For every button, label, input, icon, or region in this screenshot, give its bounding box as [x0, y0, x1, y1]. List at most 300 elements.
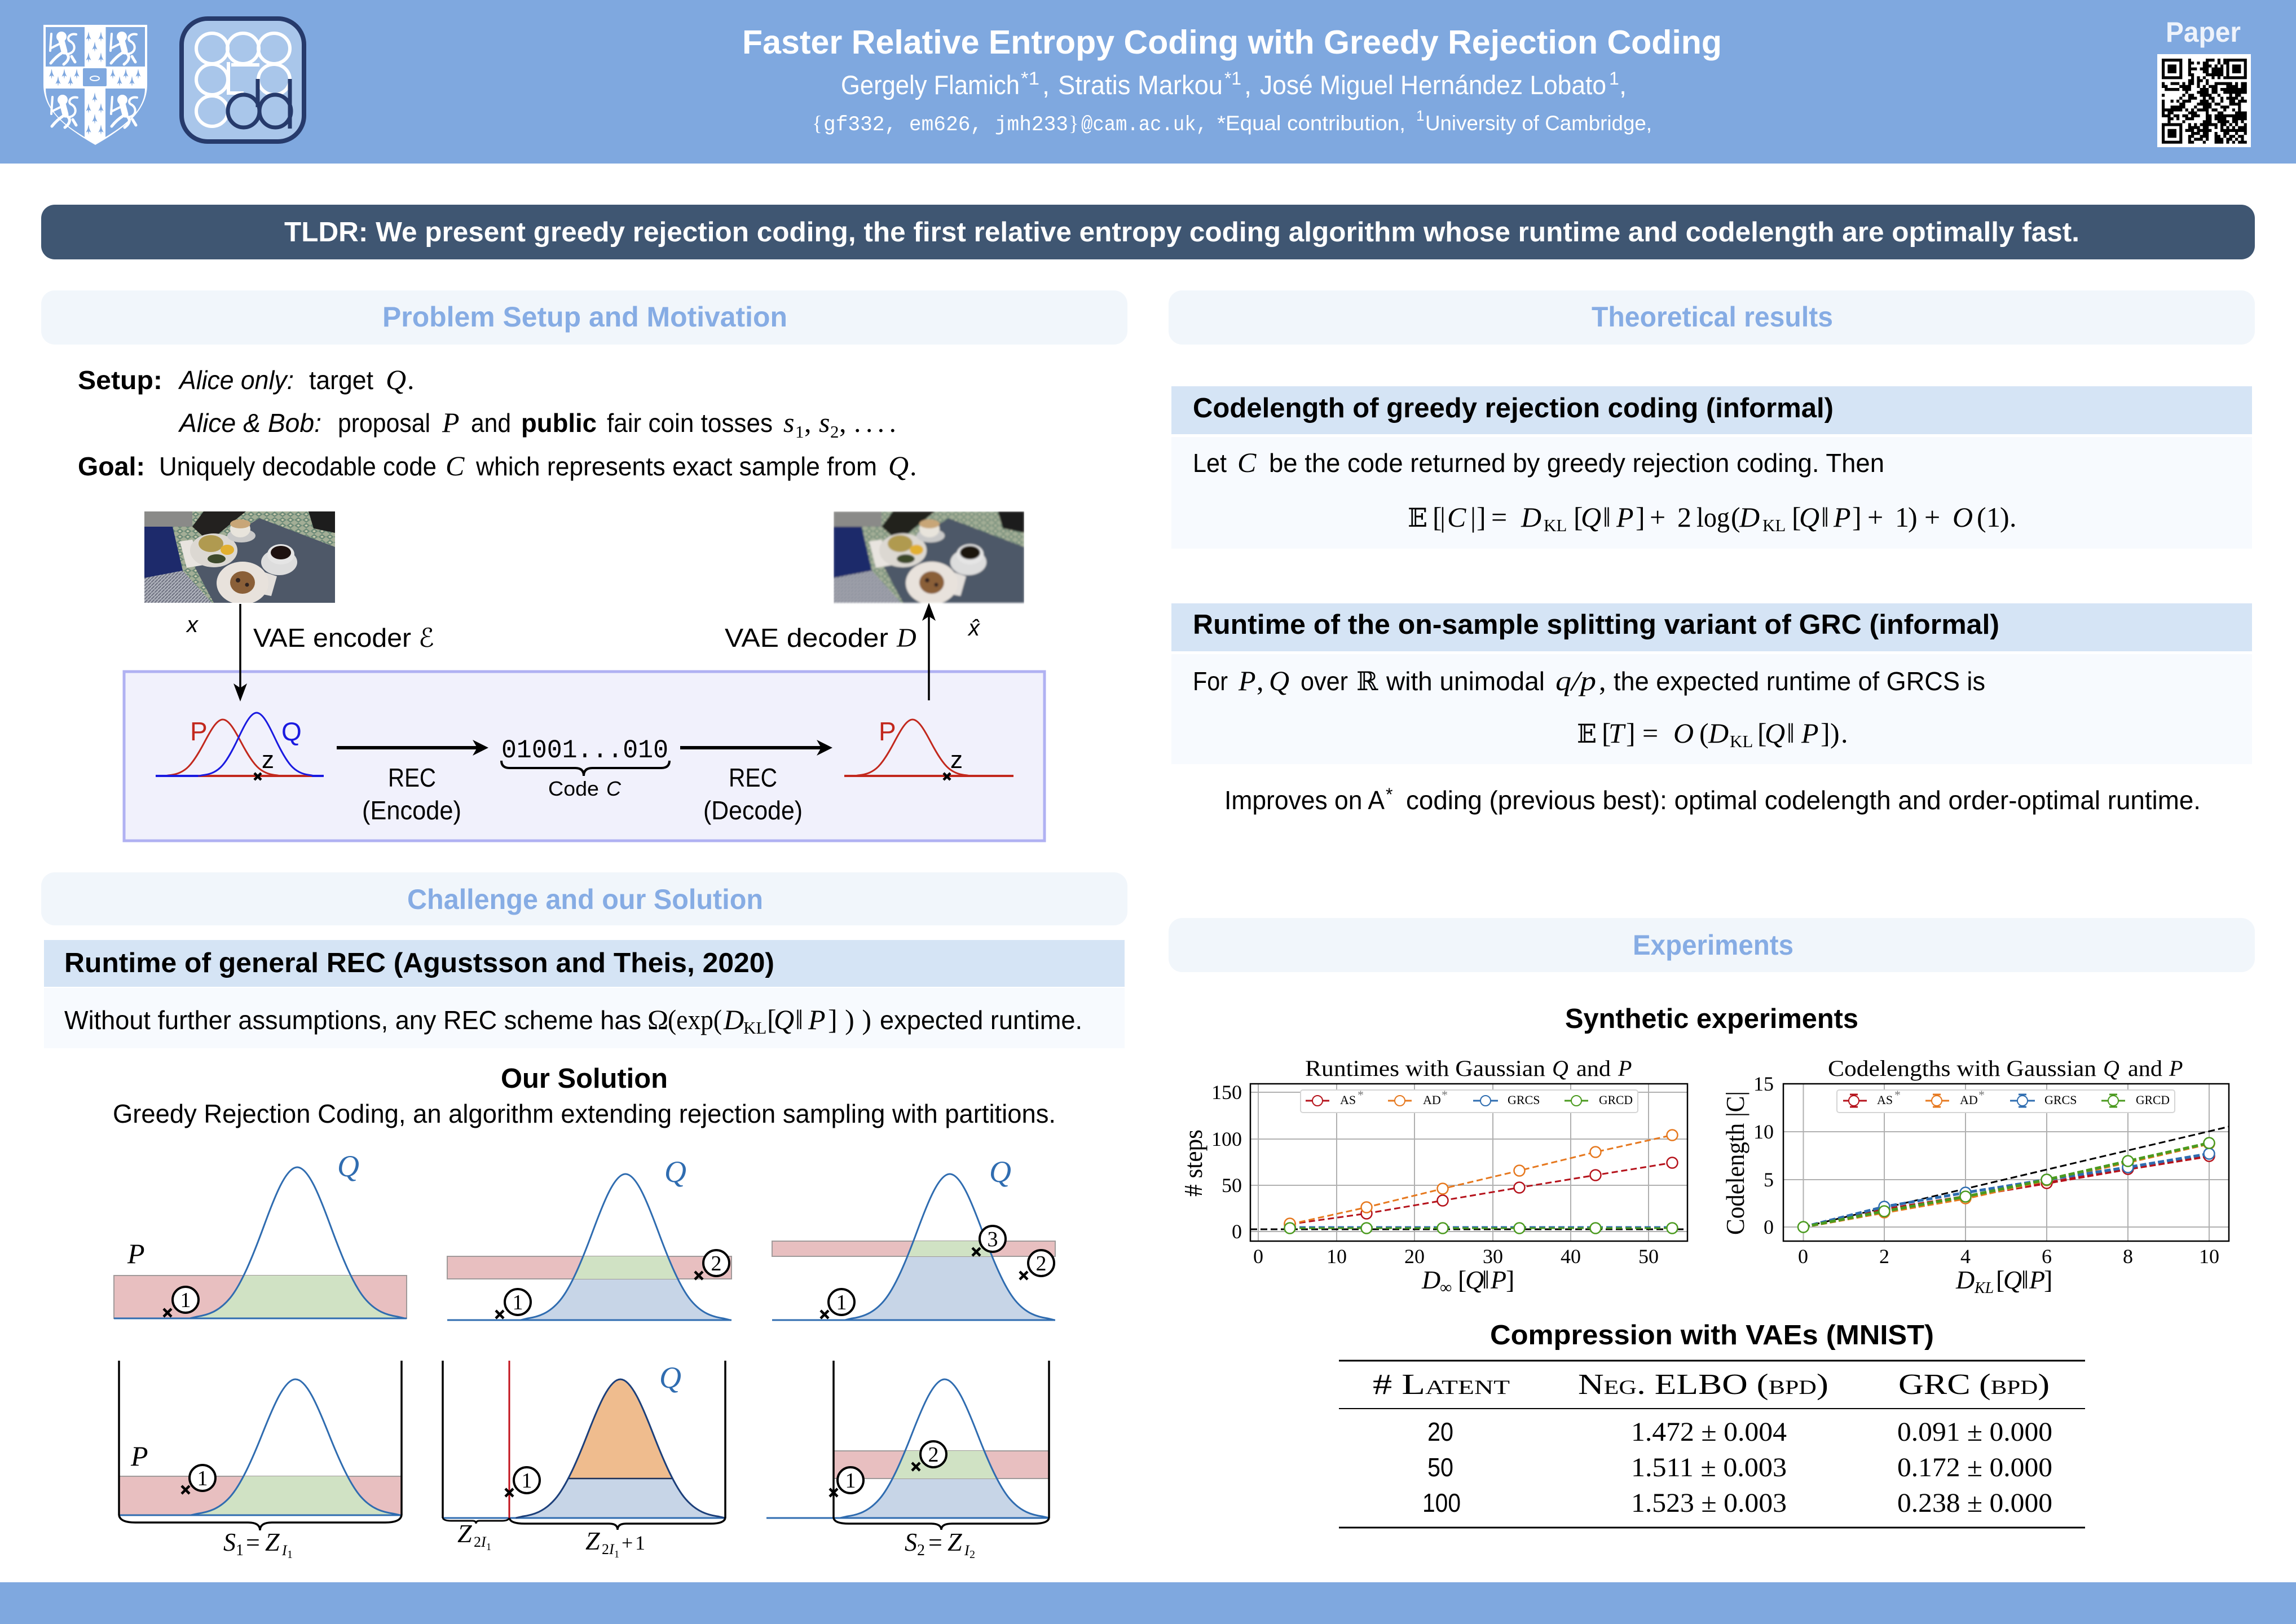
figure: rejection sampling step 2 [447, 1155, 731, 1320]
label: code C: C [606, 777, 622, 800]
axis ticks: codelengths: 2 [1879, 1245, 1889, 1268]
block body: general REC: [ [767, 1004, 777, 1035]
authors [841, 68, 1627, 100]
block heading: runtime: Runtime of the on-sample splitting variant of GRC (informal) [1193, 610, 1999, 640]
axis ticks: codelengths: 0 [1798, 1245, 1808, 1268]
text: setup line 2: , [804, 407, 811, 438]
heading: challenge [41, 872, 1127, 925]
block body: general REC [44, 988, 1125, 1048]
axis ticks: runtimes: 30 [1483, 1245, 1503, 1268]
label: x hat: x̂ [967, 616, 981, 641]
text: setup line 2: P [442, 407, 460, 438]
block body: codelength: C [1237, 447, 1257, 478]
text: code bits: 01001...010 [501, 736, 668, 765]
figure: greedy rejection coding step 1: 1 [236, 1542, 244, 1559]
figure: greedy rejection coding partition: 2 [474, 1534, 481, 1550]
block body: codelength [1171, 437, 2252, 549]
formula: expected codelength: | [1470, 501, 1476, 533]
heading: synthetic experiments: Synthetic experiments [1565, 1004, 1858, 1034]
label: VAE encoder: VAE encoder [253, 623, 411, 652]
axis label: steps: # steps [1179, 1129, 1208, 1197]
axis ticks: runtimes: 20 [1404, 1245, 1425, 1268]
block body: runtime: q/p [1555, 665, 1596, 696]
paper label: Paper [2166, 16, 2241, 48]
table: compression results: 0.091 ± 0.000 [1897, 1417, 2052, 1447]
text: setup line 2: 1 [795, 422, 804, 442]
axis label: D-infinity: Q [1465, 1265, 1484, 1294]
axis label: codelength: Codelength |C| [1721, 1091, 1749, 1235]
formula: expected codelength: D [1739, 501, 1760, 533]
text: goal: which represents exact sample from [475, 452, 877, 481]
figure: greedy rejection coding step 1: P [130, 1440, 148, 1472]
text: setup line 2: proposal [338, 408, 430, 438]
legend: codelengths: * [1978, 1088, 1985, 1102]
logo: University of Cambridge shield [43, 25, 147, 145]
formula: expected codelength: ] [1636, 501, 1645, 533]
formula: expected codelength: ] [1852, 501, 1862, 533]
image: original photo x [144, 511, 335, 604]
series: AD* [1285, 1130, 1677, 1229]
block body: general REC: ])) [828, 1004, 871, 1035]
affiliations: 1 [1416, 107, 1424, 124]
figure: greedy rejection coding step 1: I [281, 1542, 288, 1559]
axis ticks: runtimes: 0 [1253, 1245, 1263, 1268]
text: goal: Q [888, 450, 909, 482]
legend: codelengths: GRCS [2044, 1093, 2077, 1107]
formula: expected codelength: [ [1792, 501, 1801, 533]
authors: Stratis Markou [1058, 70, 1223, 100]
header band [0, 0, 2296, 164]
arrow: decode [680, 740, 832, 756]
affiliations: *Equal contribution, [1217, 112, 1405, 135]
axis ticks: codelengths: 0 [1764, 1216, 1774, 1238]
text: setup line 1: target [309, 365, 373, 395]
axis ticks: codelengths: 4 [1960, 1245, 1971, 1268]
figure: rejection sampling step 3: 3 [987, 1228, 998, 1251]
block body: general REC: KL [743, 1018, 766, 1038]
figure: rejection sampling step 1: P [127, 1238, 145, 1269]
legend: runtimes [1301, 1088, 1638, 1113]
formula: expected codelength: KL [1544, 515, 1567, 535]
block body: general REC: Q [774, 1004, 794, 1035]
formula: expected runtime: O [1673, 717, 1694, 749]
axis label: KL divergence: [ [1996, 1265, 2004, 1294]
formula: expected codelength: P [1833, 501, 1851, 533]
formula: expected runtime: T [1608, 717, 1626, 749]
chart: codelengths: and [2128, 1056, 2162, 1081]
chart: runtimes: Q [1552, 1056, 1568, 1081]
figure: greedy rejection coding step 2: 1 [845, 1469, 856, 1493]
formula: expected codelength: . [2009, 501, 2017, 533]
text: goal [78, 450, 917, 482]
formula: expected codelength: ] [1477, 501, 1486, 533]
block body: runtime: P [1238, 665, 1256, 696]
block body: runtime: , [1257, 665, 1263, 696]
formula: expected runtime: ‖ [1787, 717, 1795, 749]
authors: *1 [1224, 68, 1241, 89]
formula: expected codelength: + [1924, 501, 1940, 533]
axis label: KL divergence: Q [2003, 1265, 2022, 1294]
figure: rejection sampling step 3: 2 [1035, 1252, 1047, 1276]
block body: runtime: , [1599, 665, 1606, 696]
text: improvement summary: Improves on A [1224, 785, 1385, 815]
text: solution description: Greedy Rejection Coding, an algorithm extending rejection sampling with partitions. [113, 1099, 1056, 1128]
block body: general REC: D [723, 1004, 744, 1035]
affiliations: { [812, 112, 822, 135]
label: REC encode: REC [388, 763, 436, 792]
legend: codelengths [1837, 1088, 2175, 1113]
formula: expected runtime: [ [1602, 717, 1611, 749]
figure: greedy rejection coding partition: I [481, 1534, 487, 1550]
affiliations: University of Cambridge, [1425, 112, 1652, 135]
label: code C [548, 777, 622, 800]
text: improvement summary: coding (previous best): optimal codelength and order-optimal runtime. [1406, 785, 2201, 815]
heading: experiments: Experiments [1633, 929, 1793, 961]
formula: expected runtime: ] [1626, 717, 1636, 749]
formula: expected codelength: 1 [1895, 501, 1909, 533]
table: compression results: Neg. ELBO (bpd) [1578, 1369, 1828, 1401]
legend: runtimes: GRCD [1599, 1093, 1633, 1107]
text: setup line 2: s [819, 407, 830, 438]
axis label: KL divergence: ] [2044, 1265, 2052, 1294]
axis label: D-infinity: [ [1458, 1265, 1466, 1294]
figure: greedy rejection coding partition: 1 [521, 1469, 532, 1493]
heading: theoretical results [1169, 290, 2255, 345]
TLDR banner: TLDR: We present greedy rejection coding, the first relative entropy coding algorithm whose runtime and codelength are optimally fast. [284, 217, 2079, 248]
figure: greedy rejection coding partition: 1 [614, 1548, 619, 1560]
chart: codelengths: Q [2103, 1056, 2119, 1081]
formula: expected runtime [1577, 717, 1848, 751]
formula: expected codelength: Q [1799, 501, 1819, 533]
axis ticks: runtimes: 50 [1638, 1245, 1659, 1268]
text: goal: C [446, 450, 465, 482]
axis label: D-infinity: ] [1506, 1265, 1514, 1294]
figure: greedy rejection coding partition: I [609, 1541, 615, 1557]
formula: expected runtime: P [1801, 717, 1819, 749]
heading: problem setup [41, 290, 1127, 345]
formula: expected codelength: 1 [1986, 501, 2000, 533]
chart: P and Q densities [156, 713, 324, 780]
text: setup line 2: Alice & Bob: [178, 408, 321, 438]
footer band [0, 1582, 2296, 1624]
block heading: runtime of general REC: Runtime of general REC (Agustsson and Theis, 2020) [64, 948, 774, 978]
formula: expected codelength: D [1521, 501, 1541, 533]
label: code C: Code [548, 777, 599, 800]
formula: expected codelength: C [1447, 501, 1466, 533]
block body: general REC: ‖ [795, 1004, 803, 1035]
figure: greedy rejection coding step 2: Z [948, 1528, 962, 1556]
chart: runtimes: P [1618, 1056, 1632, 1081]
label: VAE decoder: VAE decoder [725, 623, 888, 652]
chart: P density at decoder [844, 717, 1013, 780]
box: latent coding stage [124, 672, 1045, 841]
table: compression results: # Latent [1373, 1369, 1510, 1401]
heading: problem setup: Problem Setup and Motivation [382, 301, 787, 333]
label: REC encode: (Encode) [362, 796, 461, 825]
figure: greedy rejection coding step 1: 1 [197, 1467, 208, 1490]
figure: greedy rejection coding step 2: 2 [917, 1542, 925, 1559]
figure: greedy rejection coding partition [443, 1361, 725, 1560]
block body: runtime: the expected runtime of GRCS is [1614, 667, 1985, 696]
figure: rejection sampling step 2: 1 [512, 1291, 523, 1314]
axis ticks: runtimes: 50 [1222, 1174, 1242, 1197]
text: setup line 1: . [407, 364, 414, 395]
series: AS* [1285, 1157, 1677, 1229]
figure: rejection sampling step 2: 2 [711, 1252, 722, 1276]
authors: , [1619, 70, 1627, 100]
formula: expected codelength: ( [1731, 501, 1740, 533]
series: GRCS [1803, 1148, 2214, 1227]
formula: expected codelength: ( [1977, 501, 1986, 533]
arrow: encode [337, 740, 488, 756]
affiliations: gf332, em626, jmh233 [823, 113, 1068, 137]
legend: runtimes: AD [1423, 1093, 1441, 1107]
chart: runtimes: and [1576, 1056, 1611, 1081]
formula: expected codelength: | [1440, 501, 1446, 533]
figure: greedy rejection coding partition: + [622, 1532, 633, 1554]
text: setup line 1: Q [386, 364, 406, 395]
formula: expected runtime: ) [1830, 717, 1840, 749]
authors: , [1042, 70, 1050, 100]
block body: general REC: P [808, 1004, 826, 1035]
figure: greedy rejection coding partition: Z [457, 1519, 472, 1548]
chart: runtimes [1179, 1056, 1687, 1297]
heading: challenge: Challenge and our Solution [407, 884, 763, 915]
figure: rejection sampling step 1: 1 [180, 1288, 191, 1312]
axis ticks: codelengths: 10 [1753, 1120, 1774, 1143]
figure: greedy rejection coding step 2: = [928, 1529, 942, 1556]
authors: Gergely Flamich [841, 70, 1020, 100]
block body: runtime: over [1301, 667, 1348, 696]
text: goal: Uniquely decodable code [159, 452, 437, 481]
heading: compression with VAEs: Compression with VAEs (MNIST) [1490, 1320, 1934, 1351]
formula: expected codelength: + [1650, 501, 1665, 533]
axis label: KL divergence: D [1955, 1265, 1975, 1294]
authors: , [1244, 70, 1251, 100]
QR code [2157, 54, 2251, 147]
formula: expected runtime: 𝔼 [1577, 718, 1597, 749]
block body: runtime: with unimodal [1386, 667, 1545, 696]
axis ticks: codelengths: 5 [1764, 1168, 1774, 1191]
legend: runtimes: GRCS [1508, 1093, 1540, 1107]
formula: expected codelength: + [1867, 501, 1883, 533]
figure: greedy rejection coding step 2: 2 [969, 1548, 975, 1561]
figure: rejection sampling step 1 [114, 1149, 407, 1318]
heading: theoretical results: Theoretical results [1592, 301, 1833, 333]
figure: rejection sampling step 3 [772, 1155, 1055, 1320]
block body: runtime: ℝ [1356, 666, 1378, 696]
formula: expected runtime: ] [1821, 717, 1830, 749]
text: setup line 2: , [839, 407, 846, 438]
heading: experiments [1169, 918, 2255, 972]
formula: expected codelength: ‖ [1821, 501, 1829, 533]
formula: expected codelength: O [1953, 501, 1973, 533]
text: goal: Goal: [78, 452, 145, 481]
block body: general REC: Without further assumptions, any REC scheme has [64, 1005, 641, 1035]
series: GRCD [1798, 1138, 2214, 1233]
axis label: D-infinity: ∞ [1440, 1278, 1452, 1297]
title: Faster Relative Entropy Coding with Greedy Rejection Coding [742, 24, 1722, 61]
arrow: decoder [922, 603, 936, 700]
block heading: runtime of general REC [44, 940, 1125, 987]
series: AD* [1803, 1138, 2214, 1227]
axis label: KL divergence: KL [1974, 1279, 1994, 1297]
text: setup line 2: public [521, 408, 597, 438]
axis ticks: runtimes: 40 [1561, 1245, 1581, 1268]
label: VAE encoder: ℰ [418, 623, 434, 653]
formula: expected codelength: Q [1581, 501, 1601, 533]
figure: rejection sampling step 3: Q [989, 1155, 1011, 1189]
chart: P density at decoder: P [879, 717, 896, 746]
formula: expected codelength: ) [2000, 501, 2009, 533]
text: goal: . [910, 450, 917, 482]
text: setup line 2: s [783, 407, 794, 438]
figure: rejection sampling step 1: Q [337, 1149, 359, 1183]
figure: greedy rejection coding partition: 1 [486, 1541, 491, 1552]
authors: José Miguel Hernández Lobato [1260, 70, 1606, 100]
block body: runtime [1171, 654, 2252, 764]
block body: runtime: For [1193, 667, 1228, 696]
brace: code [501, 761, 669, 776]
series: AS* [1803, 1150, 2214, 1227]
table: compression results: 20 [1427, 1417, 1453, 1446]
axis label: D-infinity: ‖ [1482, 1265, 1489, 1294]
table: compression results: 1.523 ± 0.003 [1631, 1488, 1787, 1518]
logo: CBL group [182, 19, 304, 142]
text: setup line 1 [78, 364, 414, 395]
formula: expected codelength: 2 [1677, 501, 1691, 533]
text: setup line 2: fair coin tosses [607, 408, 773, 438]
figure: greedy rejection coding partition: 2 [602, 1541, 609, 1557]
text: setup line 1: Alice only: [178, 365, 294, 395]
TLDR banner [41, 205, 2255, 259]
legend: runtimes: * [1358, 1088, 1364, 1102]
chart: codelengths [1721, 1056, 2229, 1297]
axis ticks: codelengths: 15 [1753, 1073, 1774, 1095]
table: compression results [1339, 1361, 2085, 1528]
heading: our solution: Our Solution [501, 1063, 668, 1094]
authors: 1 [1609, 68, 1619, 89]
figure: greedy rejection coding step 2: 2 [928, 1443, 938, 1467]
image: reconstructed photo x-hat [834, 511, 1024, 604]
figure: greedy rejection coding step 1: S [223, 1528, 236, 1556]
formula: expected runtime: KL [1730, 731, 1753, 751]
panel: problem setup and motivation [41, 290, 1127, 841]
table: compression results: GRC (bpd) [1898, 1369, 2050, 1401]
panel: theoretical results [1169, 290, 2255, 815]
axis ticks: runtimes: 10 [1327, 1245, 1347, 1268]
chart: P and Q densities: z [262, 746, 274, 774]
text: setup line 2: and [471, 408, 511, 438]
axis label: D-infinity: P [1490, 1265, 1506, 1294]
formula: expected runtime: = [1642, 717, 1658, 749]
axis ticks: codelengths [1753, 1073, 2219, 1268]
figure: greedy rejection coding step 1: = [246, 1529, 260, 1556]
text: improvement summary: * [1386, 784, 1392, 805]
chart: codelengths: Codelengths with Gaussian [1828, 1056, 2096, 1081]
text: setup line 2: . . . . [854, 407, 896, 438]
axis label: KL divergence: ‖ [2021, 1265, 2029, 1294]
chart: P and Q densities: Q [281, 717, 302, 746]
axis label: D-infinity [1421, 1265, 1514, 1297]
label: x: x [186, 612, 199, 637]
text: setup line 2: 2 [830, 422, 839, 442]
formula: expected codelength: KL [1762, 515, 1786, 535]
affiliations: @cam.ac.uk, [1081, 113, 1208, 137]
panel: experiments [1169, 918, 2255, 1528]
affiliations: } [1069, 112, 1079, 135]
formula: expected runtime: ( [1699, 717, 1709, 749]
chart: codelengths: P [2169, 1056, 2183, 1081]
chart: runtimes: Runtimes with Gaussian [1305, 1056, 1545, 1081]
chart: P density at decoder: z [950, 746, 963, 774]
legend: runtimes: * [1442, 1088, 1448, 1102]
arrow: encoder [233, 604, 247, 701]
label: VAE decoder: D [896, 623, 916, 653]
label: REC decode: (Decode) [703, 796, 803, 825]
formula: expected runtime: D [1708, 717, 1729, 749]
table: compression results: 100 [1422, 1488, 1461, 1517]
formula: expected codelength [1408, 501, 2017, 535]
block body: general REC: expected runtime. [880, 1005, 1082, 1035]
formula: expected runtime: . [1841, 717, 1848, 749]
axis ticks: codelengths: 6 [2042, 1245, 2052, 1268]
axis ticks: codelengths: 10 [2199, 1245, 2219, 1268]
block heading: codelength: Codelength of greedy rejection coding (informal) [1193, 393, 1834, 423]
table: compression results: 0.238 ± 0.000 [1897, 1488, 2052, 1518]
formula: expected runtime: [ [1757, 717, 1767, 749]
figure: greedy rejection coding step 2: S [905, 1528, 917, 1556]
axis ticks: codelengths: 8 [2123, 1245, 2133, 1268]
figure: greedy rejection coding partition: 1 [635, 1532, 645, 1554]
formula: expected codelength: ‖ [1603, 501, 1611, 533]
legend: runtimes: AS [1340, 1093, 1356, 1107]
formula: expected codelength: = [1491, 501, 1507, 533]
figure: greedy rejection coding step 1: 1 [287, 1548, 293, 1561]
panel: challenge and solution [41, 872, 1127, 1561]
block heading: codelength [1171, 386, 2252, 434]
formula: expected codelength: 𝔼 [1408, 502, 1427, 533]
series: GRCD [1285, 1223, 1677, 1234]
block body: runtime: Q [1269, 665, 1289, 696]
axis ticks: runtimes: 100 [1211, 1128, 1242, 1150]
table: compression results: 1.472 ± 0.004 [1631, 1417, 1787, 1447]
block body: general REC: Ω [647, 1004, 668, 1035]
axis ticks: runtimes [1211, 1081, 1659, 1268]
legend: codelengths: GRCD [2136, 1093, 2170, 1107]
chart: P and Q densities: P [190, 717, 208, 746]
formula: expected codelength: ) [1908, 501, 1918, 533]
figure: greedy rejection coding step 1 [119, 1361, 402, 1561]
figure: rejection sampling step 3: 1 [836, 1291, 847, 1314]
table: compression results: 1.511 ± 0.003 [1631, 1453, 1787, 1482]
figure: greedy rejection coding step 1: Z [265, 1528, 280, 1556]
affiliations [812, 107, 1652, 137]
figure: greedy rejection coding partition: Z [585, 1526, 600, 1555]
text: setup line 1: Setup: [78, 365, 162, 395]
formula: expected codelength: [ [1574, 501, 1583, 533]
legend: codelengths: AS [1877, 1093, 1893, 1107]
diagram: VAE with REC pipeline [124, 511, 1045, 841]
formula: expected codelength: [ [1433, 501, 1442, 533]
block body: codelength: be the code returned by greedy rejection coding. Then [1269, 448, 1884, 478]
axis label: KL divergence: P [2029, 1265, 2045, 1294]
formula: expected codelength: P [1616, 501, 1634, 533]
block body: general REC: (exp( [668, 1004, 722, 1035]
axis ticks: runtimes: 150 [1211, 1081, 1242, 1104]
figure: greedy rejection coding step 2: I [964, 1542, 970, 1559]
legend: codelengths: * [1894, 1088, 1901, 1102]
